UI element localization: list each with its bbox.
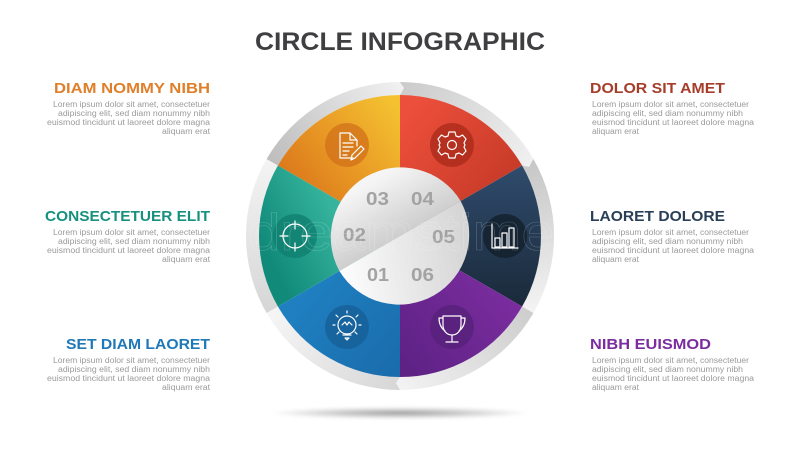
text block: diam nommy nibh: Lorem ipsum dolor sit amet, consectetuer (53, 100, 210, 109)
text block: set diam laoret: euismod tincidunt ut laoreet dolore magna (47, 374, 211, 383)
text block: laoret dolore (590, 208, 755, 264)
number 04: 04 (411, 189, 434, 209)
number 05: 05 (432, 227, 455, 247)
ground shadow (270, 407, 530, 419)
text block: laoret dolore: Lorem ipsum dolor sit amet, consectetuer (592, 228, 749, 237)
text block: consectetuer elit: euismod tincidunt ut laoreet dolore magna (47, 246, 211, 255)
text block: laoret dolore: euismod tincidunt ut laoreet dolore magna (592, 246, 755, 255)
icon: target (273, 214, 317, 258)
text block: laoret dolore: adipiscing elit, sed diam nonummy nibh (592, 237, 743, 246)
text block: diam nommy nibh: euismod tincidunt ut laoreet dolore magna (47, 118, 211, 127)
centre hub (331, 167, 469, 305)
number 01: 01 (367, 265, 389, 285)
text block: dolor sit amet: Lorem ipsum dolor sit amet, consectetuer (592, 100, 749, 109)
text block: laoret dolore: LAORET DOLORE (590, 208, 725, 225)
text block: nibh euismod: euismod tincidunt ut laoreet dolore magna (592, 374, 755, 383)
text block: consectetuer elit (45, 208, 211, 264)
segment 01: blue (278, 236, 400, 377)
text block: diam nommy nibh: DIAM NOMMY NIBH (54, 80, 210, 97)
segment 03: orange (278, 95, 400, 236)
icon: document with pencil (325, 123, 369, 167)
number 06: 06 (411, 265, 434, 285)
icon: bar chart (483, 214, 527, 258)
title: CIRCLE INFOGRAPHIC (255, 28, 545, 56)
text block: nibh euismod: Lorem ipsum dolor sit amet, consectetuer (592, 356, 749, 365)
segment 04: red (400, 95, 522, 236)
text block: set diam laoret: aliquam erat (162, 383, 211, 392)
text block: diam nommy nibh: adipiscing elit, sed diam nonummy nibh (58, 109, 210, 118)
text block: consectetuer elit: aliquam erat (162, 255, 211, 264)
icon: trophy (430, 305, 474, 349)
text block: dolor sit amet: DOLOR SIT AMET (590, 80, 725, 97)
number 02: 02 (343, 225, 366, 245)
text block: diam nommy nibh (47, 80, 211, 136)
outer segmented ring (246, 82, 554, 390)
segment 02: teal (259, 166, 400, 306)
text block: set diam laoret: adipiscing elit, sed diam nonummy nibh (58, 365, 210, 374)
number 03: 03 (366, 189, 389, 209)
text block: nibh euismod (590, 336, 755, 392)
icon: light bulb (325, 305, 369, 349)
watermark: dreamstime (248, 204, 554, 262)
text block: dolor sit amet: adipiscing elit, sed diam nonummy nibh (592, 109, 743, 118)
icon: gear (430, 123, 474, 167)
text block: set diam laoret: SET DIAM LAORET (66, 336, 210, 353)
text block: dolor sit amet: euismod tincidunt ut laoreet dolore magna (592, 118, 755, 127)
text block: diam nommy nibh: aliquam erat (162, 127, 211, 136)
text block: set diam laoret: Lorem ipsum dolor sit amet, consectetuer (53, 356, 210, 365)
text block: consectetuer elit: CONSECTETUER ELIT (45, 208, 210, 225)
segment 05: navy (400, 166, 541, 306)
text block: consectetuer elit: adipiscing elit, sed diam nonummy nibh (58, 237, 210, 246)
text block: consectetuer elit: Lorem ipsum dolor sit amet, consectetuer (53, 228, 210, 237)
text block: dolor sit amet: aliquam erat (592, 127, 640, 136)
text block: nibh euismod: adipiscing elit, sed diam nonummy nibh (592, 365, 743, 374)
text block: nibh euismod: NIBH EUISMOD (590, 336, 711, 353)
segment 06: purple (400, 236, 522, 377)
text block: set diam laoret (47, 336, 211, 392)
text block: dolor sit amet (590, 80, 755, 136)
text block: nibh euismod: aliquam erat (592, 383, 640, 392)
text block: laoret dolore: aliquam erat (592, 255, 640, 264)
